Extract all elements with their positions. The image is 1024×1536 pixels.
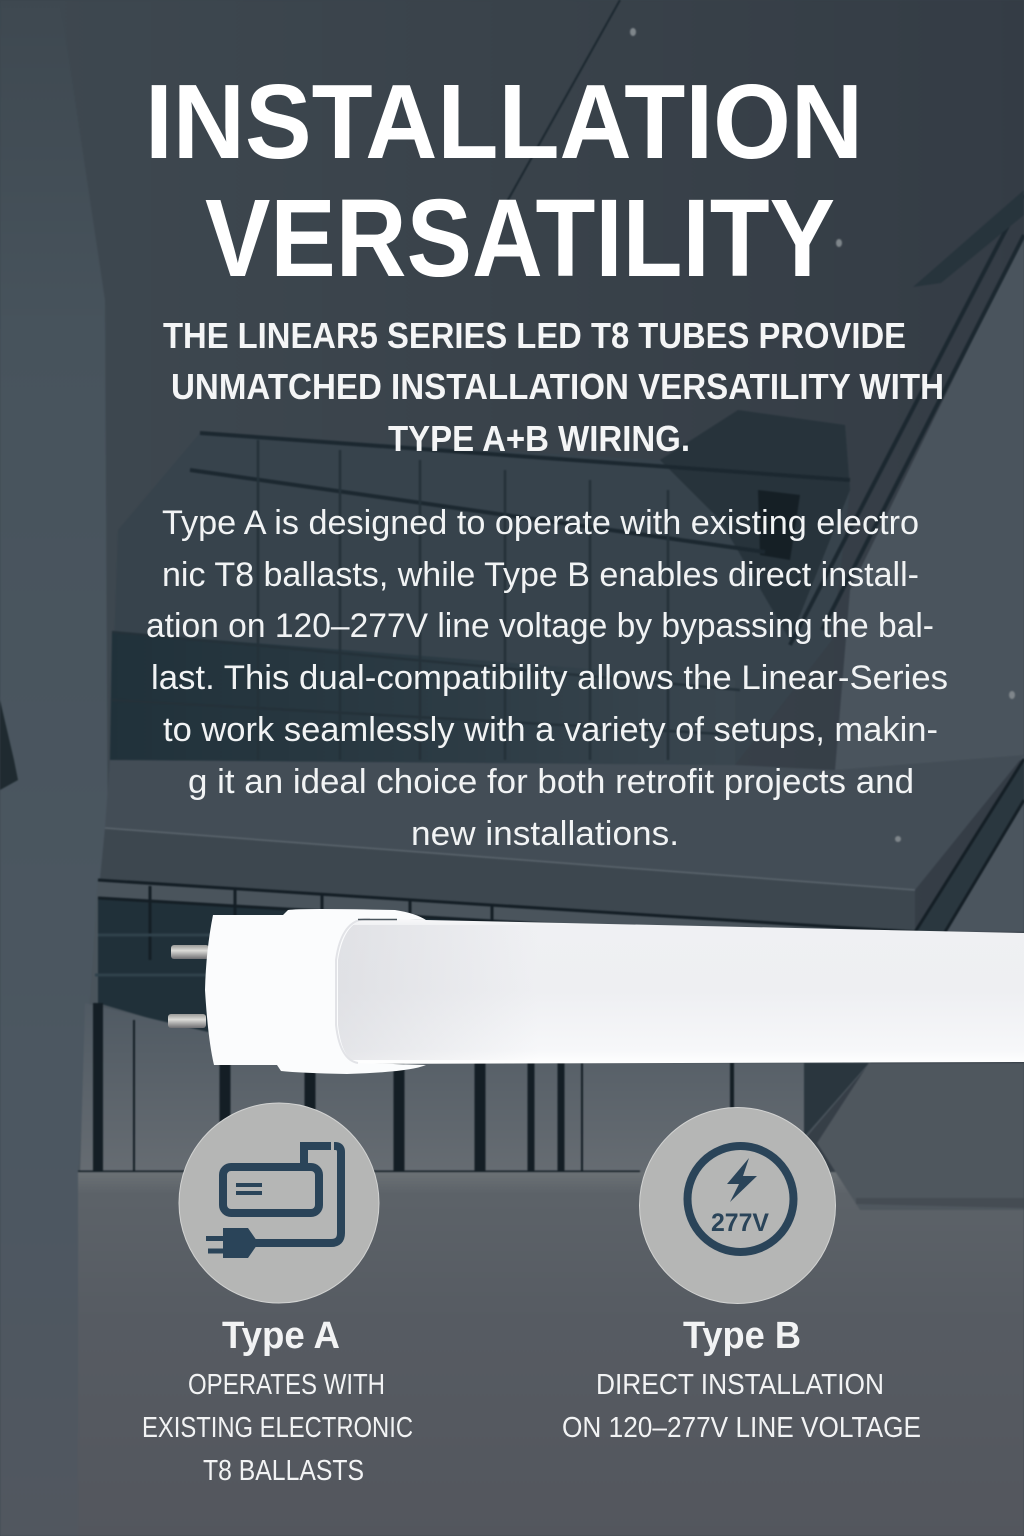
title: VERSATILITY	[205, 177, 835, 300]
body paragraph: g it an ideal choice for both retrofit projects and	[188, 763, 914, 801]
mezzanine band	[105, 755, 1024, 890]
lower windows	[78, 880, 915, 1180]
body paragraph	[146, 504, 948, 853]
body paragraph: last. This dual-compatibility allows the Linear-Series	[151, 659, 948, 697]
tube pins	[168, 945, 209, 1028]
caption: Type B: DIRECT INSTALLATION	[596, 1369, 884, 1401]
subtitle: TYPE A+B WIRING.	[388, 418, 690, 459]
caption: Type A: EXISTING ELECTRONIC	[142, 1412, 413, 1444]
caption: Type A: Type A	[222, 1315, 340, 1357]
subtitle: THE LINEAR5 SERIES LED T8 TUBES PROVIDE	[163, 315, 906, 356]
body paragraph: ation on 120–277V line voltage by bypassing the bal-	[146, 607, 934, 645]
subtitle	[163, 315, 944, 459]
floor	[78, 1172, 1024, 1536]
title: INSTALLATION	[145, 63, 863, 181]
left column	[0, 0, 108, 1536]
upper window wall	[110, 410, 850, 765]
body paragraph: new installations.	[411, 815, 679, 853]
specks	[630, 28, 1015, 842]
caption: Type B: Type B	[683, 1315, 801, 1357]
subtitle: UNMATCHED INSTALLATION VERSATILITY WITH	[171, 366, 944, 407]
body paragraph: Type A is designed to operate with existing electro	[162, 504, 919, 542]
caption: Type A: T8 BALLASTS	[203, 1455, 364, 1487]
title	[145, 63, 863, 300]
icon: Type B 277V	[640, 1108, 836, 1304]
icon: Type B 277V: 277V	[711, 1209, 769, 1237]
body paragraph: nic T8 ballasts, while Type B enables direct install-	[162, 556, 919, 594]
ceiling and railings	[105, 0, 1024, 890]
caption: Type B	[562, 1315, 921, 1444]
icon: Type A ballast and plug	[179, 1103, 379, 1303]
right lower wedge	[817, 1063, 1024, 1210]
body paragraph: to work seamlessly with a variety of setups, makin-	[163, 711, 938, 749]
LED T8 tube	[168, 909, 1024, 1074]
caption: Type A: OPERATES WITH	[188, 1369, 385, 1401]
caption: Type A	[142, 1315, 413, 1487]
caption: Type B: ON 120–277V LINE VOLTAGE	[562, 1412, 921, 1444]
right wall	[835, 235, 1024, 770]
